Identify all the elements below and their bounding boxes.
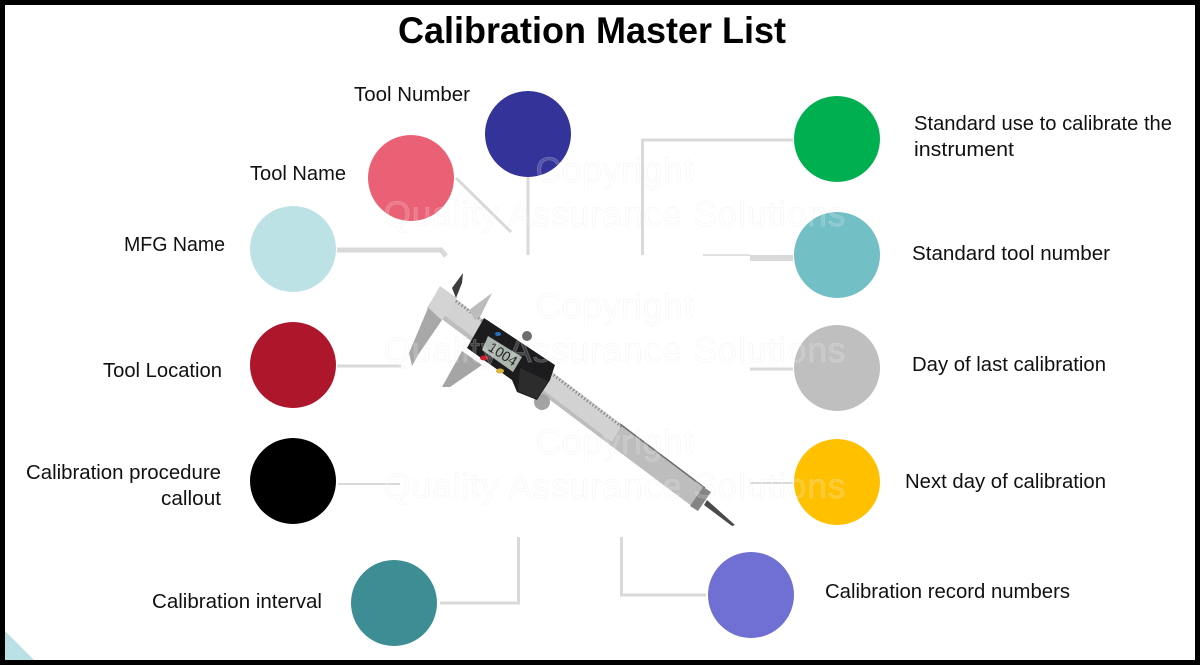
- label: calibration interval: Calibration interval: [152, 591, 322, 613]
- circle: calibration record numbers: [708, 552, 794, 638]
- end cap: [690, 487, 711, 511]
- lower fixed jaw: [409, 308, 442, 366]
- LCD reading: 1004: [486, 339, 521, 369]
- label: calibration procedure callout: callout: [161, 488, 221, 510]
- circle: calibration interval: [351, 560, 437, 646]
- connector lines: [337, 140, 793, 603]
- label: day of last calibration: Day of last calibration: [912, 354, 1106, 376]
- watermark: Copyright: [536, 287, 694, 326]
- circle: MFG name: [250, 206, 336, 292]
- corner triangle accent: [5, 631, 34, 660]
- blue badge: [495, 332, 501, 336]
- ruler scale band: [440, 295, 622, 442]
- label: tool location: Tool Location: [103, 360, 222, 382]
- circle: tool name: [368, 135, 454, 221]
- watermark: Quality Assurance Solutions: [384, 195, 846, 234]
- body: [467, 318, 555, 400]
- lower sliding jaw: [442, 351, 482, 387]
- label: standard tool number: Standard tool number: [912, 243, 1110, 265]
- upper fixed jaw: [452, 273, 463, 298]
- circle: day of last calibration: [794, 325, 880, 411]
- circle: next day of calibration: [794, 439, 880, 525]
- watermark: Copyright: [536, 423, 694, 462]
- label: next day of calibration: Next day of calibration: [905, 471, 1106, 493]
- watermark: Quality Assurance Solutions: [384, 467, 846, 506]
- LCD: [482, 336, 522, 372]
- label: tool name: Tool Name: [250, 163, 346, 185]
- ruler ticks: [456, 301, 622, 427]
- beam edge: [620, 424, 705, 488]
- circle: standard used: [794, 96, 880, 182]
- watermark: Quality Assurance Solutions: [384, 331, 846, 370]
- fixed head: [428, 286, 457, 320]
- upper sliding jaw: [469, 293, 492, 320]
- circle: tool location: [250, 322, 336, 408]
- label: MFG name: MFG Name: [124, 234, 225, 256]
- watermark: Copyright: [536, 151, 694, 190]
- label: calibration procedure callout: Calibration procedure: [26, 462, 221, 484]
- watermark: [384, 151, 846, 506]
- icon: digital caliper: [409, 273, 735, 526]
- title: Calibration Master List: [398, 10, 786, 51]
- label: standard use: Standard use to calibrate the: [914, 113, 1172, 135]
- circle: calibration procedure callout: [250, 438, 336, 524]
- label: tool number: Tool Number: [354, 84, 470, 106]
- yellow button: [496, 368, 504, 374]
- top knob: [522, 331, 532, 341]
- circle: standard tool number: [794, 212, 880, 298]
- label: standard use: instrument: [914, 139, 1014, 161]
- depth rod: [704, 500, 735, 526]
- label: calibration record numbers: Calibration record numbers: [825, 581, 1070, 603]
- grip: [518, 368, 548, 399]
- circle: tool number: [485, 91, 571, 177]
- beam: [427, 287, 708, 510]
- red button: [480, 356, 488, 360]
- thumb wheel: [534, 394, 550, 410]
